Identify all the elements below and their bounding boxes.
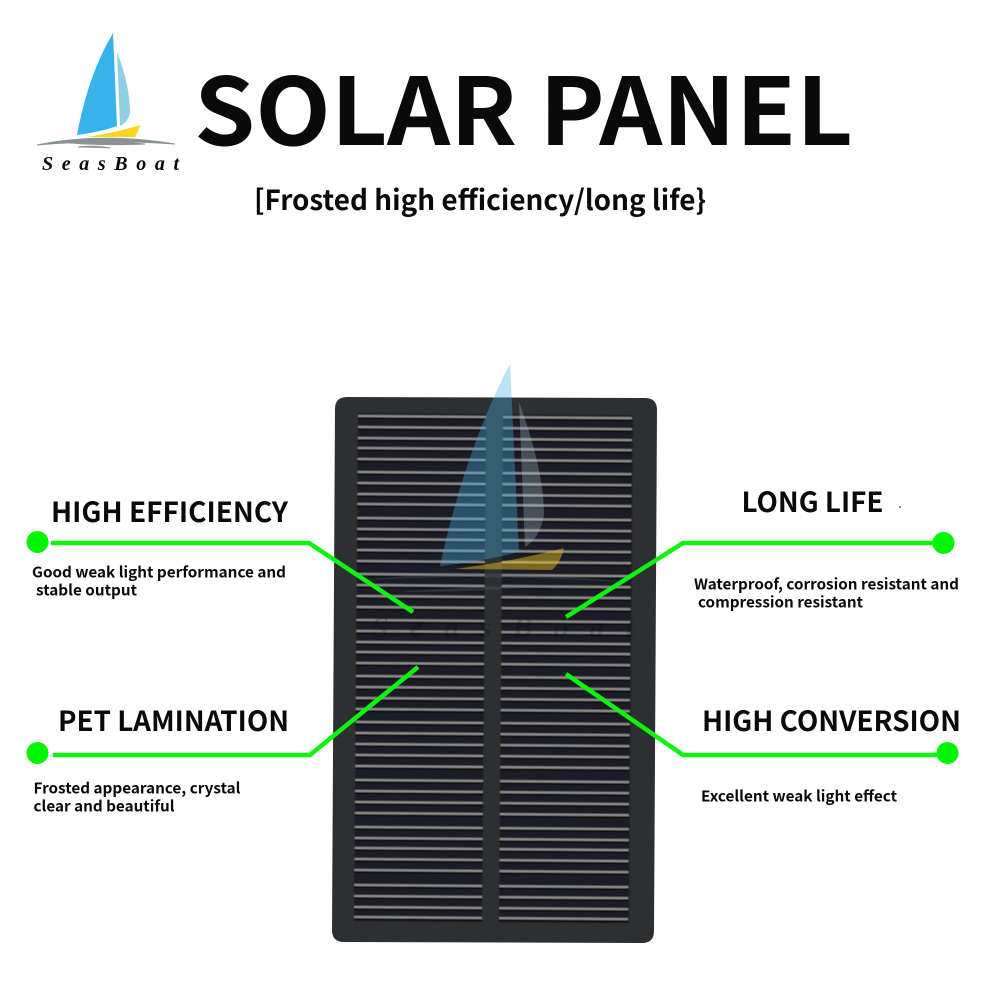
heading: PET LAMINATION: [58, 700, 289, 740]
watermark jib: [519, 402, 544, 547]
callout: PET lamination: [26, 667, 418, 816]
watermark wordmark: SeasBoat: [372, 611, 636, 644]
logo water swoosh: [37, 138, 175, 148]
callout: high efficiency: [26, 491, 413, 612]
solar cells: [354, 413, 633, 923]
title: SOLAR PANEL: [194, 37, 853, 172]
logo wordmark: SeasBoat: [42, 153, 180, 175]
heading: HIGH CONVERSION: [702, 700, 961, 740]
callout: PET lamination: clear and beautiful: [34, 796, 175, 816]
connector line: [566, 674, 940, 755]
watermark swoosh: [365, 573, 625, 592]
logo jib sail: [117, 52, 130, 126]
panel body: [332, 397, 657, 943]
solar panel: [332, 397, 657, 943]
logo main sail: [77, 33, 117, 135]
heading: HIGH EFFICIENCY: [51, 491, 289, 531]
connector line: [53, 667, 418, 755]
marker dot: [936, 742, 958, 764]
connector line: [566, 543, 935, 617]
connector line: [51, 543, 413, 612]
subtitle: [Frosted high efficiency/long life}: [254, 179, 706, 219]
watermark hull: [455, 548, 564, 570]
callout: high conversion: [566, 674, 961, 806]
logo: SeasBoat: [37, 33, 180, 175]
watermark: sailboat: [365, 364, 636, 644]
marker dot: [932, 532, 954, 554]
marker dot: [26, 742, 48, 764]
heading: LONG LIFE: [742, 481, 884, 521]
description: Good weak light performance and: [32, 562, 286, 582]
callout: high efficiency: stable output: [36, 580, 138, 600]
marker dot: [26, 531, 48, 553]
callout: long life: compression resistant: [698, 592, 864, 612]
speck: [899, 506, 901, 508]
watermark main sail: [440, 364, 519, 566]
callout: long life: [566, 481, 959, 617]
logo hull: [87, 125, 140, 137]
description: Frosted appearance, crystal: [34, 778, 241, 798]
description: Waterproof, corrosion resistant and: [694, 574, 959, 594]
description: Excellent weak light effect: [701, 786, 898, 806]
